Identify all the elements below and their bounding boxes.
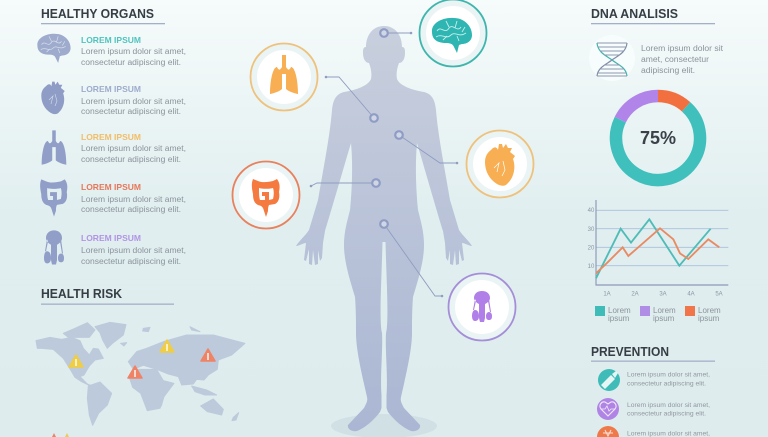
item: heartbeat: Lorem ipsum dolor sit amet, xyxy=(627,402,710,409)
world map xyxy=(36,322,245,425)
row: brain: LOREM IPSUM xyxy=(81,35,141,45)
text: DNA description: Lorem ipsum dolor sit xyxy=(641,44,724,53)
row: brain xyxy=(37,34,186,67)
chart legend xyxy=(595,306,721,323)
orange series xyxy=(596,228,719,273)
axis labels xyxy=(588,208,723,298)
chart legend: ipsum xyxy=(653,314,675,323)
row: lungs: Lorem ipsum dolor sit amet, xyxy=(81,144,186,153)
heading: DNA analisis: DNA ANALISIS xyxy=(591,6,678,21)
line chart xyxy=(596,200,728,285)
text: DNA description xyxy=(641,44,724,75)
row: heart xyxy=(41,82,186,116)
row: brain: consectetur adipiscing elit. xyxy=(81,58,181,67)
circle: heart xyxy=(466,130,534,198)
connector: brain xyxy=(380,29,412,37)
row: intestine: Lorem ipsum dolor sit amet, xyxy=(81,195,186,204)
item: heartbeat: consectetur adipiscing elit. xyxy=(627,410,706,418)
chart legend: ipsum xyxy=(698,314,720,323)
item: syringe xyxy=(598,369,710,391)
body figure xyxy=(296,26,472,437)
heading: prevention: PREVENTION xyxy=(591,344,669,359)
axis labels: 3A xyxy=(659,292,667,298)
chart legend: Lorem xyxy=(653,306,676,315)
icon: DNA helix xyxy=(589,35,635,81)
heading: health risk: HEALTH RISK xyxy=(41,286,123,301)
chart legend: Lorem xyxy=(698,306,721,315)
axis labels: 4A xyxy=(687,292,695,298)
axis labels: 30 xyxy=(588,227,595,233)
teal series xyxy=(596,219,711,278)
row: reproductive xyxy=(44,230,186,266)
row: intestine xyxy=(40,179,186,217)
axis labels: 10 xyxy=(588,264,595,270)
row: intestine: LOREM IPSUM xyxy=(81,182,141,192)
panel: DNA analysis xyxy=(589,6,724,180)
silhouette xyxy=(296,26,472,431)
panel: health risk xyxy=(36,286,245,437)
icon: warning USA xyxy=(69,355,83,367)
text: DNA description: amet, consectetur xyxy=(641,55,709,64)
connector: heart xyxy=(395,131,458,164)
circle: intestine xyxy=(232,162,300,228)
row: reproductive: consectetur adipiscing elit. xyxy=(81,257,181,266)
donut chart xyxy=(616,96,700,180)
axis labels: 1A xyxy=(603,292,611,298)
connector: intestine xyxy=(310,179,380,187)
chart legend: Lorem xyxy=(608,306,631,315)
icon: warning Russia xyxy=(160,340,174,352)
axis labels: 2A xyxy=(631,292,639,298)
row: heart: consectetur adipiscing elit. xyxy=(81,107,181,116)
row: heart: LOREM IPSUM xyxy=(81,84,141,94)
connector: reproductive xyxy=(380,220,443,297)
circle: brain xyxy=(420,0,486,66)
panel: prevention xyxy=(591,344,715,437)
row: heart: Lorem ipsum dolor sit amet, xyxy=(81,97,186,106)
row: lungs: consectetur adipiscing elit. xyxy=(81,155,181,164)
row: reproductive: Lorem ipsum dolor sit amet, xyxy=(81,246,186,255)
axis labels: 5A xyxy=(715,292,723,298)
chart legend: ipsum xyxy=(608,314,630,323)
donut chart: 75% xyxy=(640,128,676,148)
row: intestine: consectetur adipiscing elit. xyxy=(81,205,181,214)
axes xyxy=(596,200,728,285)
panel: healthy organs xyxy=(37,6,186,266)
row: lungs: LOREM IPSUM xyxy=(81,132,141,142)
ground shadow xyxy=(331,414,437,437)
text: DNA description: adipiscing elit. xyxy=(641,66,695,75)
axis labels: 40 xyxy=(588,208,595,214)
grid lines xyxy=(596,210,728,266)
cropped legend icons xyxy=(51,433,70,437)
icon: warning Asia xyxy=(201,349,215,361)
connector: lungs xyxy=(325,76,378,122)
heading: healthy organs: HEALTHY ORGANS xyxy=(41,6,154,21)
row: lungs xyxy=(42,130,186,165)
row: brain: Lorem ipsum dolor sit amet, xyxy=(81,47,186,56)
item: heartbeat xyxy=(597,398,710,420)
item: syringe: Lorem ipsum dolor sit amet, xyxy=(627,372,710,378)
item: syringe: consectetur adipiscing elit. xyxy=(627,380,706,388)
row: reproductive: LOREM IPSUM xyxy=(81,233,141,243)
icon: warning Africa xyxy=(128,366,142,378)
circle: lungs xyxy=(250,44,318,110)
circle: reproductive xyxy=(448,274,516,340)
axis labels: 20 xyxy=(588,246,595,252)
